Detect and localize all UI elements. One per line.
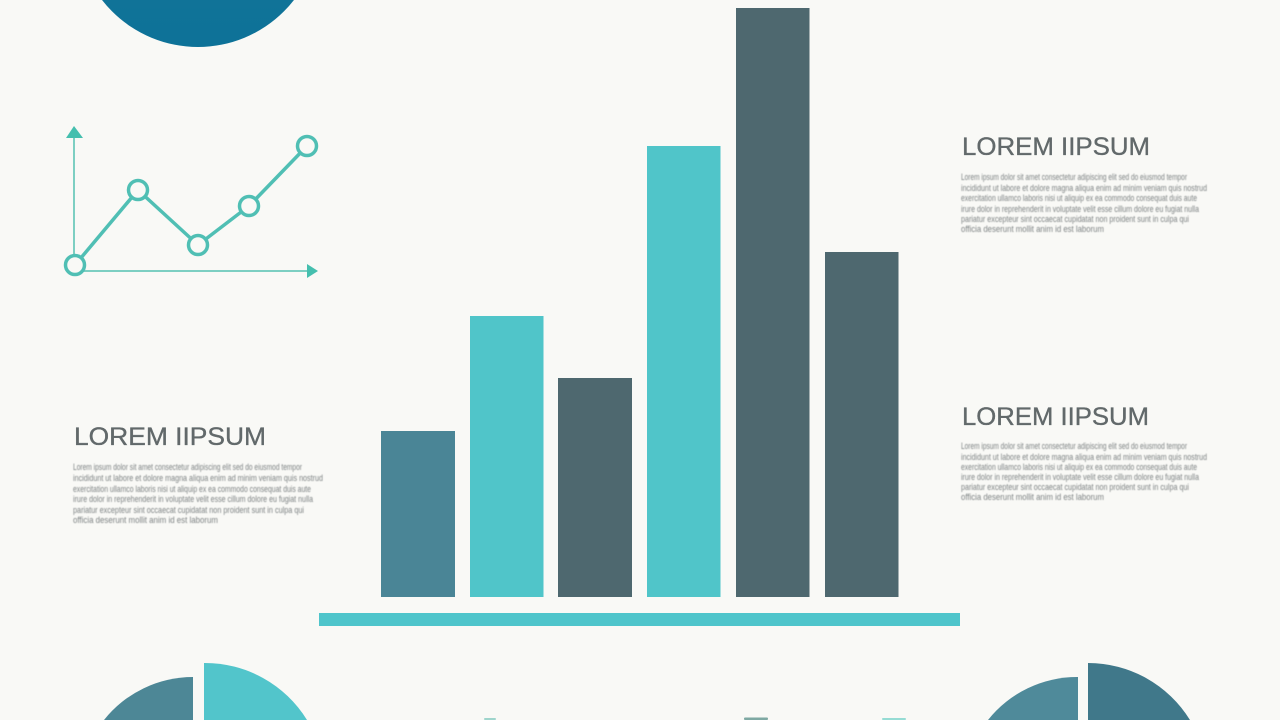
- text block: middle right: officia deserunt mollit anim id est laborum: [961, 492, 1104, 502]
- bar chart: [319, 8, 960, 626]
- text block: left: Lorem ipsum dolor sit amet consectetur adipiscing elit sed do eiusmod tempor: [73, 462, 302, 472]
- bottom chart tips: [484, 718, 906, 720]
- text block: top right: [961, 133, 1207, 234]
- text block: left: irure dolor in reprehenderit in voluptate velit esse cillum dolore eu fugiat nulla: [73, 494, 313, 504]
- text block: top right: irure dolor in reprehenderit in voluptate velit esse cillum dolore eu fugiat nulla: [961, 204, 1199, 214]
- text block: top right: Lorem ipsum dolor sit amet consectetur adipiscing elit sed do eiusmod tempor: [961, 172, 1187, 182]
- text block: top right: officia deserunt mollit anim id est laborum: [961, 224, 1104, 234]
- text block: middle right: Lorem ipsum dolor sit amet consectetur adipiscing elit sed do eiusmod tempor: [961, 441, 1187, 451]
- text block: left: LOREM IIPSUM: [74, 423, 266, 451]
- top circle: [76, 0, 320, 47]
- line chart icon: [66, 126, 318, 278]
- text block: left: pariatur excepteur sint occaecat cupidatat non proident sunt in culpa qui: [73, 505, 304, 515]
- text block: left: [73, 423, 323, 525]
- text block: top right: LOREM IIPSUM: [962, 133, 1150, 161]
- text block: middle right: pariatur excepteur sint occaecat cupidatat non proident sunt in culpa qui: [961, 482, 1189, 492]
- text block: middle right: irure dolor in reprehenderit in voluptate velit esse cillum dolore eu fugiat nulla: [961, 472, 1199, 482]
- text block: left: incididunt ut labore et dolore magna aliqua enim ad minim veniam quis nostrud: [73, 473, 323, 483]
- pie chart: bottom left: [104, 663, 307, 720]
- pie chart: bottom right: [988, 663, 1190, 720]
- text block: top right: pariatur excepteur sint occaecat cupidatat non proident sunt in culpa qui: [961, 214, 1189, 224]
- text block: top right: incididunt ut labore et dolore magna aliqua enim ad minim veniam quis nostrud: [961, 183, 1207, 193]
- text block: middle right: [961, 403, 1207, 502]
- text block: left: officia deserunt mollit anim id est laborum: [73, 515, 218, 525]
- text block: left: exercitation ullamco laboris nisi ut aliquip ex ea commodo consequat duis aute: [73, 484, 311, 494]
- text block: middle right: incididunt ut labore et dolore magna aliqua enim ad minim veniam quis nostrud: [961, 452, 1207, 462]
- text block: middle right: exercitation ullamco laboris nisi ut aliquip ex ea commodo consequat duis aute: [961, 462, 1197, 472]
- text block: top right: exercitation ullamco laboris nisi ut aliquip ex ea commodo consequat duis aute: [961, 193, 1197, 203]
- text block: middle right: LOREM IIPSUM: [962, 403, 1149, 431]
